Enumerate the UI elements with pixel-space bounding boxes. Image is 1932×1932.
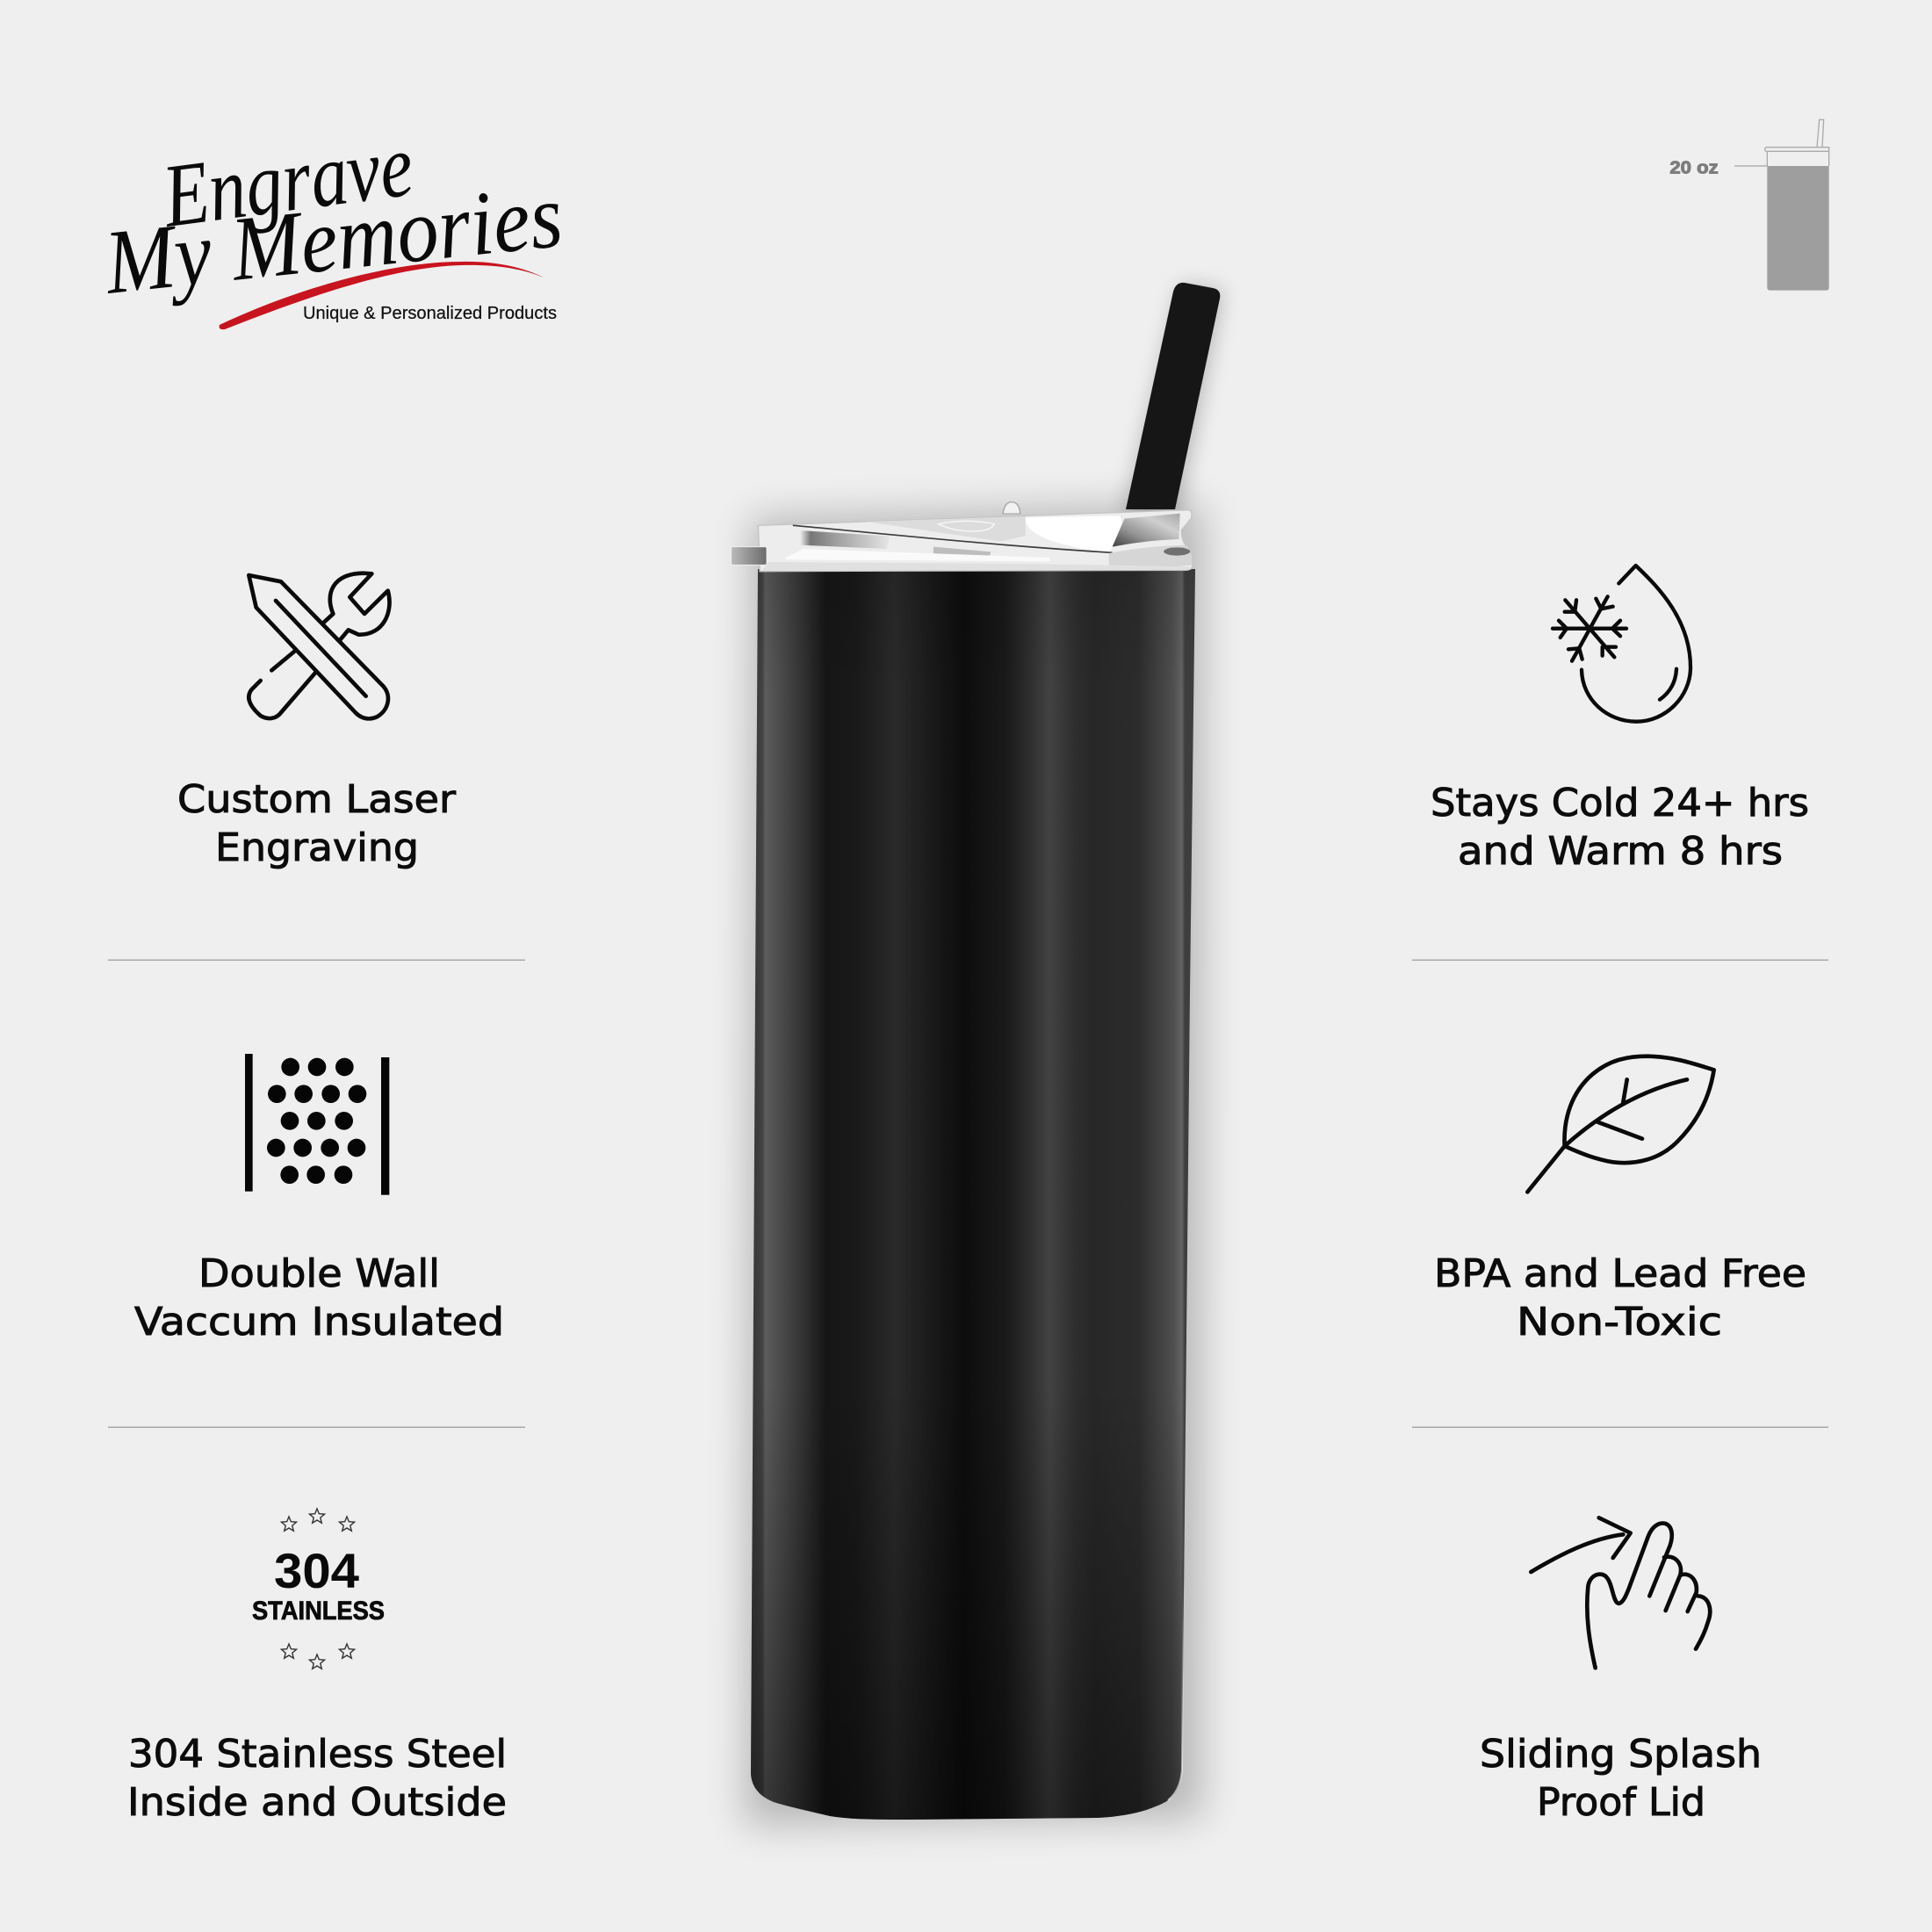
caption bbox=[1434, 1251, 1806, 1344]
straw shadow bbox=[1124, 285, 1222, 518]
caption: 304 Stainless Steel bbox=[128, 1732, 507, 1777]
caption: Vaccum Insulated bbox=[134, 1300, 504, 1344]
logo word: Engrave: Engrave bbox=[156, 116, 419, 247]
caption: Engraving bbox=[215, 825, 419, 870]
lid tab bbox=[731, 547, 767, 565]
logo words: My Memories: My Memories bbox=[99, 165, 567, 314]
feature: BPA and lead free bbox=[1434, 1056, 1806, 1344]
feature: sliding splash proof lid bbox=[1480, 1517, 1762, 1825]
lid outline reflection bbox=[939, 521, 994, 531]
caption: Inside and Outside bbox=[127, 1780, 507, 1825]
tumbler shadow bbox=[745, 505, 1203, 1825]
caption: Proof Lid bbox=[1537, 1780, 1705, 1825]
logo: Engrave My Memories bbox=[99, 116, 567, 329]
caption: Custom Laser bbox=[177, 777, 457, 822]
lid white highlight bbox=[1026, 515, 1122, 552]
lid dark spot bbox=[1164, 547, 1190, 556]
caption bbox=[127, 1732, 507, 1825]
caption bbox=[134, 1251, 504, 1344]
lid base shading bbox=[761, 562, 1192, 571]
caption: and Warm 8 hrs bbox=[1458, 829, 1783, 874]
lid body bbox=[758, 510, 1193, 572]
tumbler body bbox=[751, 569, 1195, 1820]
feature: stays cold and warm bbox=[1431, 566, 1809, 874]
lid lower rim bbox=[1109, 545, 1193, 568]
capacity fill bbox=[1767, 166, 1829, 291]
caption: BPA and Lead Free bbox=[1434, 1251, 1806, 1296]
caption bbox=[177, 777, 457, 870]
mini tumbler outline bbox=[1765, 119, 1829, 166]
straw bbox=[1126, 283, 1220, 509]
caption: Stays Cold 24+ hrs bbox=[1431, 781, 1809, 825]
icon: leaf bbox=[1527, 1056, 1714, 1192]
caption bbox=[1431, 781, 1809, 874]
lid middle detail bbox=[934, 547, 991, 559]
lid left band bbox=[800, 530, 890, 549]
lid bbox=[731, 502, 1193, 572]
feature: double wall vacuum insulated bbox=[134, 1054, 504, 1344]
icon: 304 stainless badge bbox=[252, 1509, 385, 1669]
lid left glint bbox=[786, 549, 1049, 561]
icon: insulation wall dots bbox=[245, 1054, 389, 1195]
logo red swoosh bbox=[220, 262, 544, 329]
lid right reflection bbox=[1113, 514, 1180, 547]
feature: custom laser engraving bbox=[177, 573, 457, 870]
icon: hand swipe with arrow bbox=[1531, 1517, 1710, 1668]
icon: crossed screwdriver and wrench bbox=[249, 573, 389, 718]
caption bbox=[1480, 1732, 1762, 1825]
product: black tumbler with lid and straw bbox=[731, 283, 1222, 1825]
capacity indicator: 20 oz bbox=[1669, 119, 1829, 291]
capacity leader line bbox=[1734, 165, 1767, 167]
lid upper reflection bbox=[866, 516, 1026, 542]
caption: Non-Toxic bbox=[1517, 1300, 1722, 1344]
caption: Double Wall bbox=[198, 1251, 440, 1296]
badge number: 304 bbox=[274, 1543, 359, 1598]
lid knob bbox=[1003, 502, 1020, 514]
caption: Sliding Splash bbox=[1480, 1732, 1762, 1777]
icon: water drop with snowflake bbox=[1553, 566, 1690, 722]
badge stars bbox=[281, 1509, 355, 1669]
logo tagline: Unique & Personalized Products bbox=[303, 304, 557, 323]
badge word: STAINLESS bbox=[252, 1597, 385, 1626]
lid dark seam bbox=[793, 525, 1113, 552]
capacity label: 20 oz bbox=[1669, 158, 1719, 178]
feature: 304 stainless steel bbox=[127, 1509, 507, 1825]
